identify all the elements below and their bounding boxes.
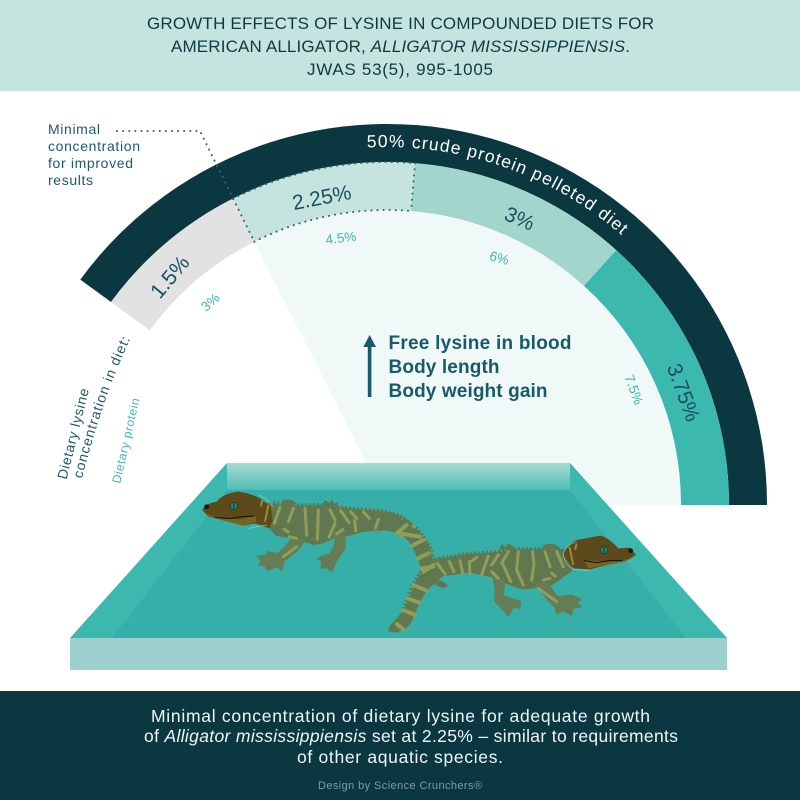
shoulder and hip — [542, 544, 560, 552]
conclusion text: of Alligator mississippiensis set at 2.25% – similar to requirements — [144, 726, 678, 746]
hind leg and foot — [317, 528, 346, 572]
header band — [0, 0, 800, 91]
light sector behind results — [254, 210, 681, 505]
alligator: left — [202, 492, 434, 573]
segment: 1.5% lysine: 1.5% — [146, 252, 194, 303]
callout: minimal concentration: Minimal — [48, 121, 100, 137]
hind leg and foot — [492, 575, 521, 616]
segment: 3% lysine — [411, 163, 616, 286]
dietary protein value labels: 7.5% — [622, 373, 646, 407]
stripes — [397, 525, 563, 629]
segment: 3.75% lysine: 3.75% — [662, 361, 704, 425]
dietary protein value labels: 6% — [488, 248, 511, 268]
results list: Body length — [388, 357, 500, 378]
conclusion text — [144, 706, 678, 767]
axis label: dietary protein: Dietary protein — [109, 397, 142, 485]
dietary protein value labels: 4.5% — [325, 229, 357, 247]
alligator: right — [380, 512, 636, 632]
segment: 2.25% lysine — [233, 162, 415, 242]
left alligator tail overlap — [380, 512, 433, 570]
collar tag — [563, 542, 590, 571]
title: AMERICAN ALLIGATOR, ALLIGATOR MISSISSIPPIENSIS. — [171, 37, 630, 56]
head — [563, 536, 636, 569]
collar tag — [248, 495, 273, 528]
segment: 3.75% lysine — [584, 250, 729, 505]
title: GROWTH EFFECTS OF LYSINE IN COMPOUNDED DIETS FOR — [147, 14, 654, 33]
arrow: increase — [363, 335, 376, 397]
footer band — [0, 691, 800, 800]
dotted highlight of minimal concentration — [117, 131, 415, 242]
conclusion text: of other aquatic species. — [297, 747, 503, 767]
callout: minimal concentration — [48, 121, 140, 188]
eye — [600, 546, 608, 554]
stripes — [274, 507, 432, 571]
water tank — [70, 463, 727, 670]
results list: Free lysine in blood — [388, 333, 572, 354]
conclusion text: Minimal concentration of dietary lysine for adequate growth — [151, 706, 650, 726]
segment: 2.25% lysine: 2.25% — [290, 181, 353, 215]
results list: Body weight gain — [388, 381, 548, 402]
shoulder and hip — [282, 499, 296, 508]
segment: 1.5% lysine — [111, 199, 254, 330]
axis label: dietary lysine concentration: concentration in diet: — [76, 337, 130, 478]
body and tail — [267, 503, 432, 573]
title: JWAS 53(5), 995-1005 — [307, 60, 493, 79]
eye — [230, 502, 238, 510]
results list — [388, 333, 572, 402]
credit: Design by Science Crunchers® — [318, 780, 482, 792]
front leg and foot — [535, 582, 582, 615]
callout: minimal concentration: concentration — [48, 138, 140, 154]
title — [147, 14, 654, 79]
body and tail — [389, 550, 572, 632]
axis label: dietary lysine concentration: Dietary lysine — [54, 386, 92, 481]
head — [202, 492, 273, 528]
callout: minimal concentration: for improved — [48, 155, 133, 171]
callout: minimal concentration: results — [48, 172, 93, 188]
front leg and foot — [257, 537, 305, 571]
arc label: 50% crude protein pelleted diet — [368, 134, 628, 235]
dietary protein value labels — [198, 229, 646, 407]
segment: 3% lysine: 3% — [501, 203, 538, 236]
dietary protein value labels: 3% — [198, 290, 223, 314]
